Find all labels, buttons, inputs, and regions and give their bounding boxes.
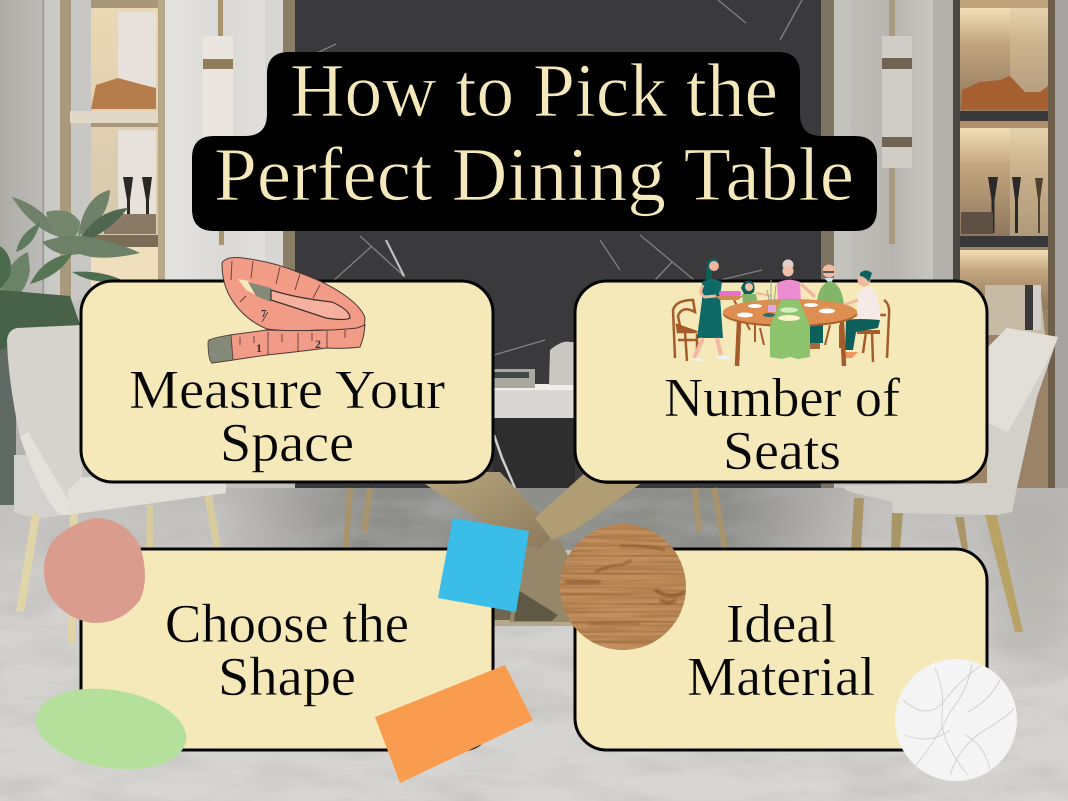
grandmother — [777, 260, 815, 303]
background: floor — [0, 486, 1068, 801]
panel: ideal material — [575, 549, 987, 750]
grandfather — [810, 264, 844, 349]
icon: pink circle — [44, 518, 145, 623]
panel: choose the shape — [81, 549, 493, 750]
title banner — [192, 49, 877, 231]
tape inner band — [271, 290, 350, 320]
background: planter behind left chair — [0, 340, 60, 518]
title line 1: How to Pick the — [290, 49, 778, 133]
heading: choose the shape: Choose the — [165, 593, 409, 654]
icon: green oval — [30, 679, 192, 779]
title line 2: Perfect Dining Table — [214, 133, 854, 217]
background: table top, teapot and base — [346, 342, 725, 626]
icon: blue square — [438, 518, 529, 612]
panel: ideal material: Material — [687, 646, 875, 707]
young man — [838, 270, 881, 358]
left chair — [673, 300, 697, 361]
heading: ideal material: Ideal — [726, 593, 836, 654]
panel: measure your space — [81, 281, 493, 482]
background: plant — [0, 190, 140, 350]
background: right chair — [840, 328, 1058, 632]
tape loop hole — [238, 279, 256, 295]
background: left wall — [0, 0, 60, 500]
heading: measure your space: Measure Your — [129, 359, 445, 420]
icon: orange rectangle — [375, 665, 533, 783]
table top — [723, 301, 857, 327]
back chair legs — [734, 300, 840, 348]
panel: number of seats — [575, 281, 987, 482]
title background shape — [192, 52, 877, 231]
background: left shelf — [60, 0, 295, 300]
icon: marble circle — [895, 659, 1017, 781]
panel: number of seats: Seats — [723, 420, 841, 481]
tape numbers: 1 — [256, 341, 262, 355]
icon: tape measure: 2 — [315, 337, 321, 351]
icon: family at dining table — [673, 258, 889, 366]
tape upper loop — [222, 258, 365, 331]
icon: wood circle — [560, 524, 686, 650]
right chair — [857, 300, 889, 362]
background: black marble wall — [295, 0, 821, 490]
panel: choose the shape: Shape — [218, 646, 356, 707]
icon: tape measure: 7 — [261, 308, 267, 320]
table base — [493, 590, 575, 621]
heading: number of seats: Number of — [664, 367, 901, 428]
left wall lamp — [203, 0, 233, 245]
icon: tape measure — [208, 258, 365, 363]
plates and food — [737, 280, 835, 321]
panel: measure your space: Space — [220, 412, 354, 473]
right wall lamp — [882, 0, 912, 244]
background: left chair — [7, 325, 226, 643]
table runner — [770, 300, 810, 359]
child — [741, 281, 772, 304]
tape metal end — [208, 335, 233, 363]
background: right wall and shelf — [820, 0, 1068, 500]
standing woman — [691, 258, 743, 362]
tape metal tab — [248, 282, 271, 302]
tape lower strap — [209, 325, 365, 363]
